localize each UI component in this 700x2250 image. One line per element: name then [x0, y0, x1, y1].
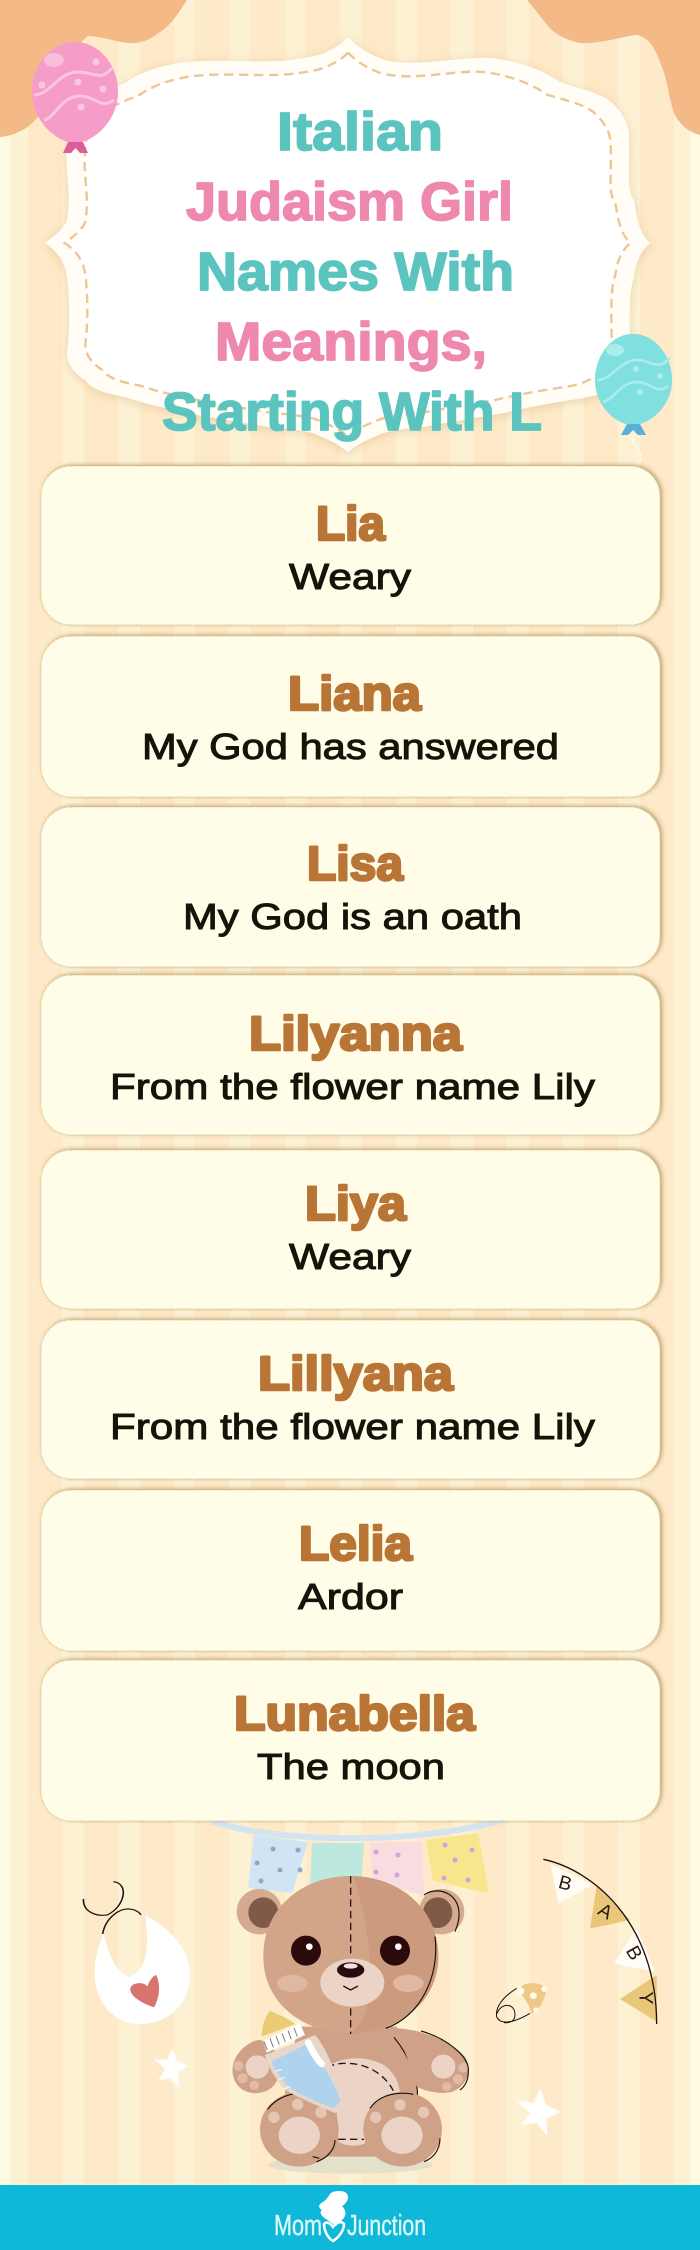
- icon: baby banner: Y: [634, 1992, 655, 2005]
- icon: baby banner: [543, 1859, 657, 2024]
- bear shadow: [268, 2156, 433, 2174]
- title plaque: [45, 37, 650, 452]
- name card: Lilyanna: [41, 975, 660, 1135]
- name card: Lilyanna: Lilyanna: [249, 1008, 462, 1061]
- footer logo: MomJunction: Mom: [274, 2210, 322, 2242]
- name card: Lelia: [41, 1490, 660, 1651]
- footer bar: [0, 2185, 700, 2250]
- illustration: teddy bear with bottle: [232, 1876, 469, 2174]
- title: Judaism Girl: [186, 172, 513, 232]
- curtain: top left: [0, 0, 187, 137]
- name card: Lisa: My God is an oath: [183, 896, 522, 937]
- name card: Liya: Liya: [305, 1178, 406, 1231]
- icon: blue balloon: [595, 334, 672, 472]
- icon: baby banner: A: [594, 1900, 616, 1924]
- name card: Lillyana: From the flower name Lily: [110, 1406, 595, 1447]
- name card: Lelia: Lelia: [299, 1518, 412, 1571]
- icon: baby banner: B: [556, 1872, 574, 1896]
- title: [162, 102, 542, 442]
- name card: Lisa: Lisa: [307, 838, 403, 891]
- bunting flags: [212, 1814, 520, 1896]
- name card: Lilyanna: From the flower name Lily: [110, 1066, 595, 1107]
- curtain: top right: [527, 0, 700, 135]
- footer logo: MomJunction: [274, 2191, 426, 2242]
- bear head: [263, 1876, 438, 2034]
- name card: Lia: Lia: [316, 498, 385, 551]
- bear arms: [232, 2028, 469, 2093]
- name card: Lunabella: The moon: [257, 1746, 445, 1787]
- name card: Liana: [41, 636, 660, 797]
- name card: Lillyana: Lillyana: [258, 1348, 453, 1401]
- icon: safety pin: [496, 1983, 547, 2023]
- name card: Lia: Weary: [289, 556, 411, 597]
- title: Italian: [277, 102, 443, 162]
- bear feet: [260, 2092, 442, 2167]
- name card: Lillyana: [41, 1320, 660, 1479]
- title: Names With: [197, 242, 514, 302]
- icon: small star: [154, 2048, 188, 2088]
- name card: Lisa: [41, 807, 660, 967]
- name card: Liya: [41, 1150, 660, 1309]
- footer logo: MomJunction: Junction: [347, 2210, 426, 2242]
- name card: Lia: [41, 466, 660, 625]
- icon: bib: [83, 1882, 190, 2024]
- icon: pink balloon: [32, 42, 118, 153]
- name card: Liya: Weary: [289, 1236, 411, 1277]
- baby bottle: [262, 2011, 345, 2113]
- name card: Lunabella: [41, 1660, 660, 1821]
- name card: Lunabella: Lunabella: [234, 1688, 475, 1741]
- name card: Liana: Liana: [288, 668, 421, 721]
- title: Starting With L: [162, 382, 542, 442]
- bear body: [285, 2027, 417, 2157]
- bear ears: [237, 1889, 464, 1934]
- icon: baby banner: B: [621, 1942, 646, 1964]
- title: Meanings,: [215, 312, 487, 372]
- name card: Lelia: Ardor: [298, 1576, 403, 1617]
- icon: large star: [517, 2088, 561, 2136]
- name card: Liana: My God has answered: [142, 726, 559, 767]
